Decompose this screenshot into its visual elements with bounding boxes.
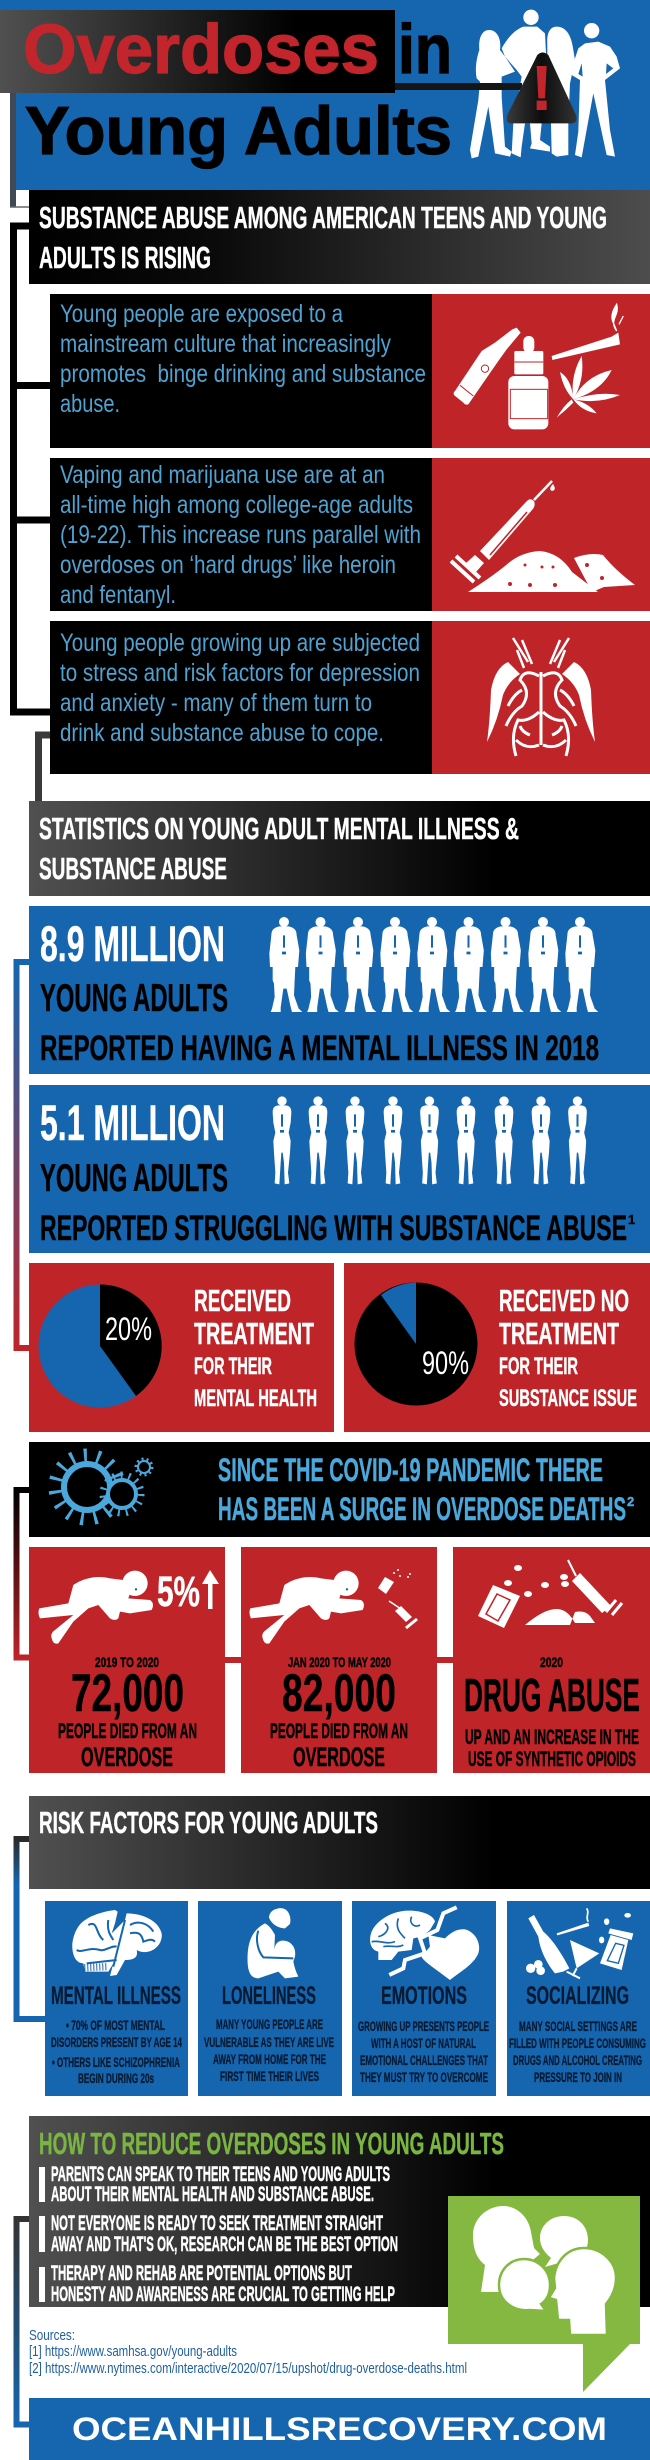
connector line to warning sign [395, 83, 522, 90]
tip: research: NOT EVERYONE IS READY TO SEEK TREATMENT STRAIGHT [51, 2212, 383, 2235]
panel: 5.1 million: 1 [628, 1212, 635, 1227]
text block: sources: Sources: [29, 2327, 75, 2344]
icon: bottle, martini, joint and pills [526, 1908, 633, 1978]
tip: talk to teens [39, 2163, 390, 2206]
text: stress: and anxiety - many of them turn to [60, 689, 372, 717]
panel: loneliness: LONELINESS [222, 1982, 316, 2010]
panel: 8.9 million: YOUNG ADULTS [40, 977, 228, 1020]
icon: syringe and powder [451, 481, 635, 592]
text: culture: mainstream culture that increasingly [60, 330, 391, 358]
section heading: risk factors: RISK FACTORS FOR YOUNG ADULTS [39, 1805, 378, 1840]
tip: research [39, 2212, 398, 2256]
panel: 82,000 deaths [241, 1547, 437, 1773]
section heading: statistics: SUBSTANCE ABUSE [39, 851, 227, 886]
panel: covid heading [29, 1442, 650, 1537]
icon: cracked brain [72, 1910, 162, 1976]
text: vaping: (19-22). This increase runs parallel with [60, 521, 421, 549]
panel: 72,000 deaths: 2019 TO 2020 [95, 1654, 159, 1670]
text: emotions details: THEY MUST TRY TO OVERCOME [360, 2069, 488, 2085]
icon: collapsed person [38, 1571, 153, 1644]
section heading: statistics [29, 801, 650, 896]
pie chart: 20% [38, 1284, 162, 1408]
panel: stress [50, 621, 650, 774]
panel: received no treatment: FOR THEIR [499, 1353, 578, 1380]
text: stress [60, 629, 420, 747]
title: Young Adults [25, 93, 452, 169]
tip: therapy and rehab [39, 2262, 395, 2306]
text: loneliness details: MANY YOUNG PEOPLE ARE [216, 2016, 323, 2032]
icon: up arrow [202, 1570, 219, 1609]
panel: received treatment: RECEIVED [194, 1283, 291, 1318]
panel: 82,000 deaths: 82,000 [282, 1664, 396, 1723]
text: mental illness details [51, 2017, 182, 2086]
panel: 82,000 deaths: OVERDOSE [293, 1742, 385, 1772]
section heading: substance abuse: ADULTS IS RISING [39, 240, 211, 275]
panel: 82,000 deaths: PEOPLE DIED FROM AN [270, 1720, 408, 1743]
panel: vaping [50, 458, 650, 611]
title: in [398, 10, 452, 88]
icon: pills, bottle, syringe and powder [478, 1560, 622, 1628]
panel: 5.1 million [29, 1085, 650, 1253]
panel: received treatment [29, 1263, 334, 1432]
connector: section one bracket [10, 207, 50, 712]
text: mental illness details: DISORDERS PRESENT BY AGE 14 [51, 2034, 182, 2050]
icon: brain and heart [370, 1907, 479, 1980]
panel: mental illness: MENTAL ILLNESS [51, 1982, 181, 2010]
section: how to reduce overdoses [29, 2116, 650, 2307]
icon: row of nine slim figures [273, 1096, 587, 1184]
text: vaping: and fentanyl. [60, 581, 176, 609]
footer: website: OCEANHILLSRECOVERY.COM [72, 2411, 607, 2447]
text: culture [60, 300, 426, 418]
panel: drug abuse: 2020 [540, 1654, 563, 1670]
text: culture: Young people are exposed to a [60, 300, 343, 328]
panel: 5.1 million: 5.1 MILLION [40, 1095, 225, 1151]
icon: row of nine figures [269, 917, 598, 1012]
text: mental illness details: • OTHERS LIKE SCHIZOPHRENIA [52, 2054, 180, 2070]
text: stress: to stress and risk factors for depression [60, 659, 420, 687]
panel: received treatment: FOR THEIR [194, 1353, 272, 1380]
title: Overdoses [23, 10, 379, 88]
text: vaping: overdoses on ‘hard drugs’ like heroin [60, 551, 396, 579]
panel: emotions: EMOTIONS [381, 1982, 467, 2010]
icon: vape, bottle, joint and leaf [454, 304, 623, 429]
connector: risk factors bracket [16, 1839, 45, 2019]
title [23, 10, 452, 169]
icon: four young adults silhouettes [470, 10, 620, 158]
header panel [0, 0, 650, 207]
connector: statistics bracket [16, 962, 29, 1348]
text: culture: abuse. [60, 390, 120, 418]
tip: talk to teens: ABOUT THEIR MENTAL HEALTH AND SUBSTANCE ABUSE. [51, 2183, 374, 2206]
text: stress: Young people growing up are subjected [60, 629, 420, 657]
connector: covid bracket [16, 1490, 453, 1660]
text: mental illness details: • 70% OF MOST MENTAL [66, 2017, 165, 2033]
panel: drug abuse [453, 1547, 650, 1773]
text: loneliness details: VULNERABLE AS THEY ARE LIVE [204, 2034, 334, 2050]
panel: mental illness [45, 1901, 188, 2096]
icon: virus particles [55, 1455, 152, 1519]
text: vaping [60, 461, 421, 609]
panel: received treatment: TREATMENT [194, 1316, 314, 1351]
icon: collapsed person [249, 1571, 364, 1644]
text: loneliness details [204, 2016, 334, 2084]
panel: received no treatment [344, 1263, 650, 1432]
panel: 82,000 deaths: JAN 2020 TO MAY 2020 [288, 1654, 391, 1670]
panel: covid heading: 2 [627, 1494, 634, 1509]
text: loneliness details: AWAY FROM HOME FOR THE [213, 2051, 326, 2067]
panel: loneliness [198, 1901, 342, 2096]
text: socializing details [509, 2018, 646, 2085]
icon: spray and syringe [378, 1569, 417, 1628]
panel: 8.9 million: 8.9 MILLION [40, 916, 225, 972]
text: culture: promotes binge drinking and substance [60, 360, 426, 388]
text: mental illness details: BEGIN DURING 20s [78, 2070, 154, 2086]
panel: 8.9 million [29, 906, 650, 1074]
connector: to statistics heading [38, 735, 50, 801]
text block: sources: [2] https://www.nytimes.com/interactive/2020/07/15/upshot/drug-overdose-deaths.html [29, 2360, 467, 2377]
panel: 72,000 deaths [29, 1547, 225, 1773]
panel: 72,000 deaths: 5% [157, 1568, 200, 1616]
connector: footer bracket [16, 2219, 29, 2424]
panel: 72,000 deaths: PEOPLE DIED FROM AN [58, 1720, 197, 1743]
section heading: risk factors [29, 1796, 650, 1889]
panel: 72,000 deaths: OVERDOSE [81, 1742, 173, 1772]
panel: received treatment: MENTAL HEALTH [194, 1385, 317, 1412]
pie chart: 90% [354, 1282, 478, 1406]
text: emotions details: EMOTIONAL CHALLENGES THAT [360, 2052, 488, 2068]
icon: warning triangle [507, 52, 577, 123]
text block: sources: [1] https://www.samhsa.gov/young-adults [29, 2343, 237, 2360]
icon: stressed brain [487, 638, 595, 756]
panel: emotions [352, 1901, 496, 2096]
panel: socializing [507, 1901, 650, 2096]
footer: website [29, 2398, 650, 2460]
text: loneliness details: FIRST TIME THEIR LIVES [220, 2068, 319, 2084]
text: stress: drink and substance abuse to cope. [60, 719, 384, 747]
pie chart: 20%: 20% [105, 1311, 152, 1347]
text: emotions details: WITH A HOST OF NATURAL [371, 2035, 476, 2051]
text: emotions details [358, 2018, 489, 2085]
panel: 72,000 deaths: 72,000 [71, 1664, 184, 1723]
text: vaping: Vaping and marijuana use are at an [60, 461, 385, 489]
panel: culture [50, 294, 650, 448]
section heading: substance abuse [29, 190, 650, 284]
text: vaping: all-time high among college-age adults [60, 491, 413, 519]
panel: 5.1 million: YOUNG ADULTS [40, 1157, 228, 1200]
icon: green speech bubble with heads [448, 2196, 640, 2392]
text block: sources [29, 2327, 467, 2377]
pie chart: 90%: 90% [422, 1345, 469, 1381]
text: emotions details: GROWING UP PRESENTS PEOPLE [358, 2018, 489, 2034]
icon: lonely seated person [248, 1908, 298, 1978]
tip: therapy and rehab: THERAPY AND REHAB ARE POTENTIAL OPTIONS BUT [51, 2262, 352, 2285]
